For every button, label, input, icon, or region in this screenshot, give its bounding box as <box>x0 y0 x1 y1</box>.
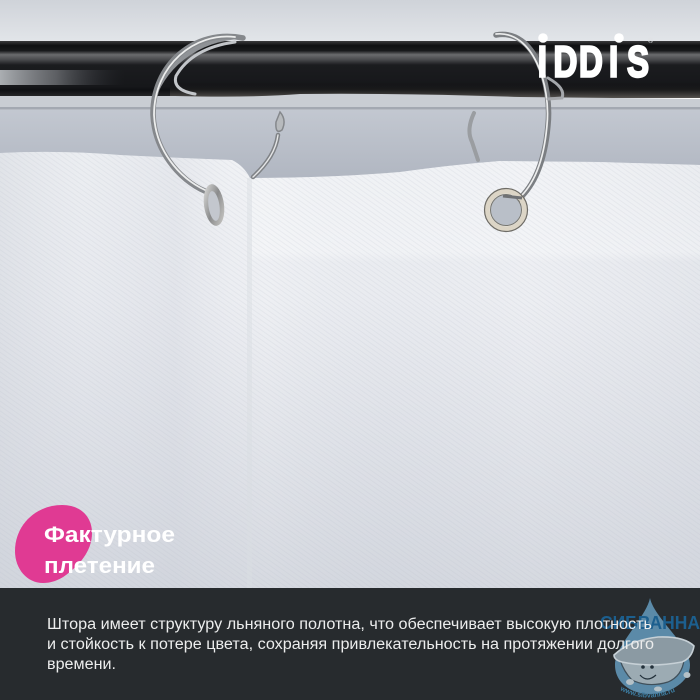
heading: плетение <box>44 553 155 578</box>
caption text: Штора имеет структуру льняного полотна, что обеспечивает высокую плотность <box>47 616 652 633</box>
shower curtain fabric <box>0 152 700 590</box>
ring inner reflection on rod <box>175 42 235 94</box>
fabric weave texture <box>0 152 700 590</box>
heading <box>44 522 175 578</box>
right grommet <box>484 188 528 232</box>
bathtub rim <box>614 637 694 665</box>
ring opening arm <box>253 135 278 177</box>
ring end over grommet <box>503 196 522 198</box>
left grommet <box>201 183 227 227</box>
left curtain ring <box>153 35 284 193</box>
water drop <box>615 598 690 694</box>
chrome curtain rod <box>0 41 700 110</box>
wall above the rod <box>0 0 700 42</box>
ring clasp <box>276 112 284 131</box>
watermark name: СИБВАННА <box>600 613 700 633</box>
caption text: времени. <box>47 656 116 673</box>
ring main arc <box>496 34 549 200</box>
wall below the rod <box>0 108 700 188</box>
fabric hem band <box>252 161 700 262</box>
iddis logo: IDDIS <box>538 38 649 87</box>
pink blob accent <box>15 505 92 583</box>
heading: Фактурное <box>44 522 175 547</box>
bathtub face <box>641 665 654 669</box>
rod lower reflection <box>0 94 700 110</box>
logo dots <box>538 33 548 43</box>
ring reflection on rod <box>548 78 563 99</box>
rod lower warm band <box>170 82 700 98</box>
watermark url: www.sibvanna.ru <box>620 686 675 698</box>
fabric vertical shading <box>0 152 700 590</box>
bathtub feet <box>626 672 690 692</box>
caption text <box>47 616 654 673</box>
registered mark: ® <box>648 37 654 45</box>
ring main arc <box>153 36 243 193</box>
right curtain ring <box>469 34 563 200</box>
fold at the left grommet <box>247 178 252 588</box>
watermark: sibvanna logo <box>600 598 700 698</box>
fabric lower fade <box>0 300 700 590</box>
bathtub body <box>620 660 684 685</box>
dark caption band <box>0 588 700 700</box>
ring back arm and clasp <box>469 113 478 160</box>
caption text: и стойкость к потере цвета, сохраняя привлекательность на протяжении долгого <box>47 636 654 653</box>
rod highlight <box>0 70 125 85</box>
ring thick crescent top <box>153 35 243 105</box>
